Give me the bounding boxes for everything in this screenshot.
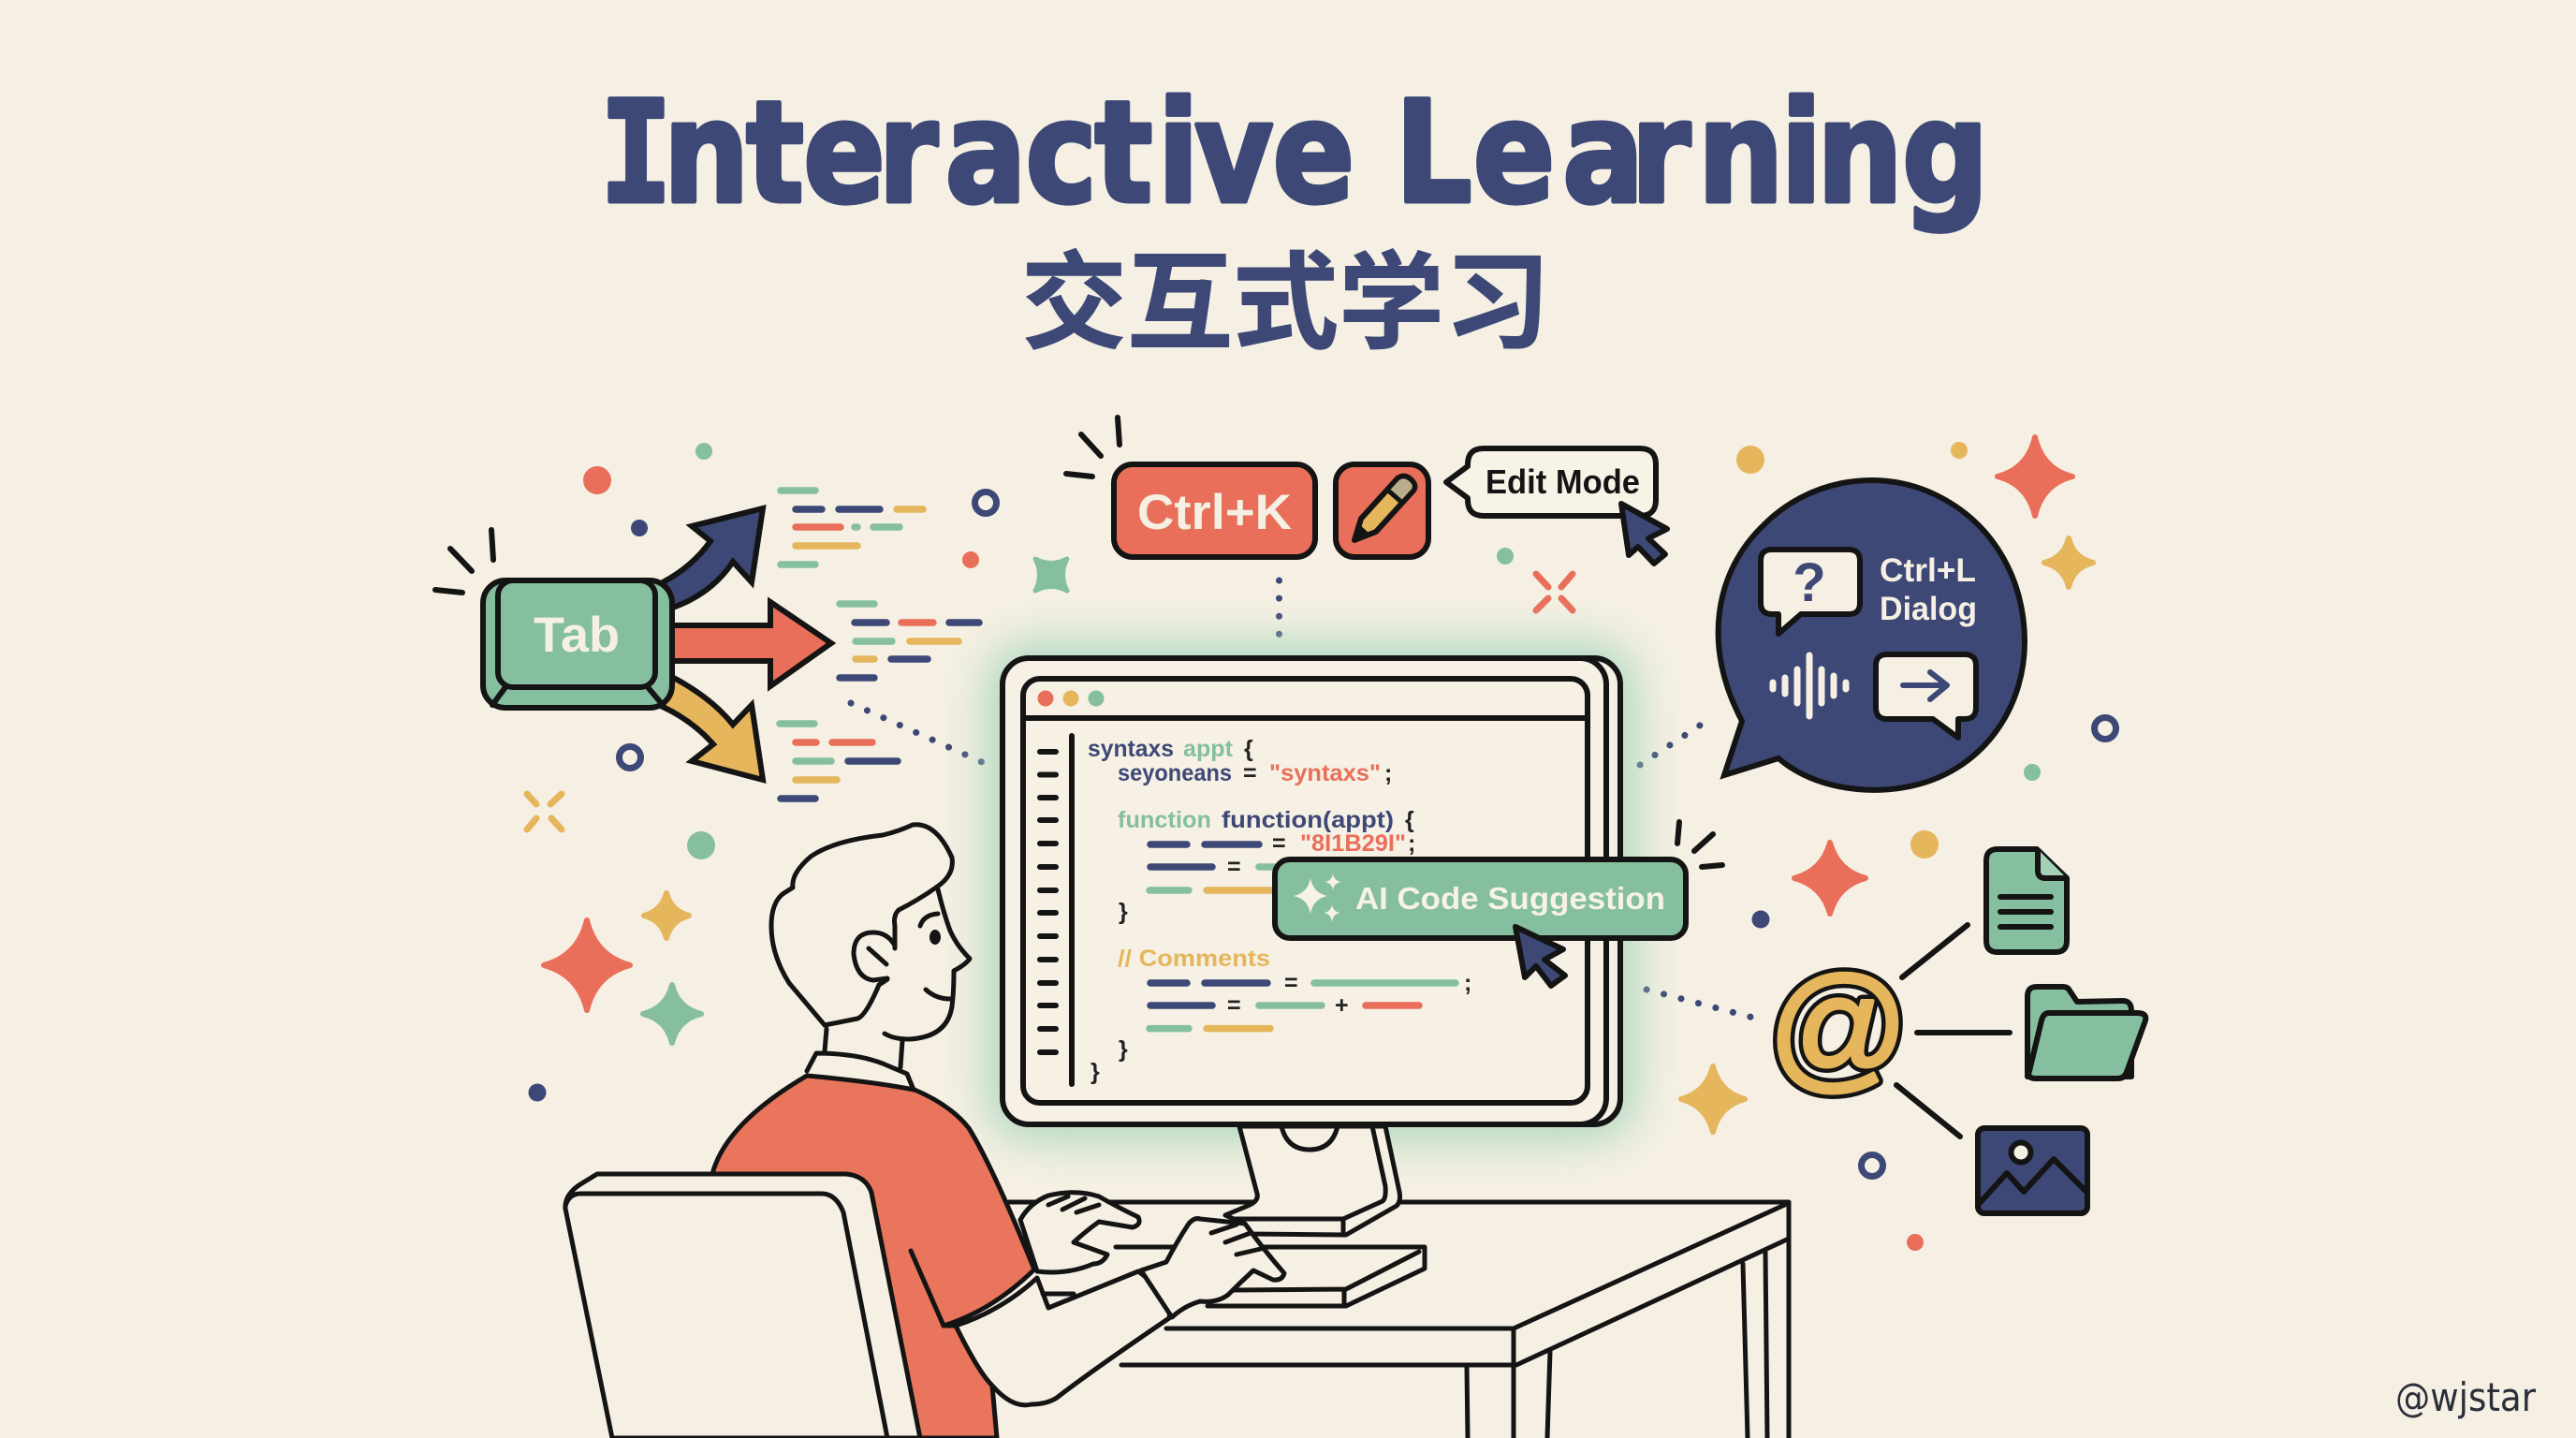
arrow: navy bbox=[663, 508, 763, 609]
shortcut: Ctrl+L dialog bubble bbox=[1719, 480, 2025, 790]
monitor front bezel bbox=[1003, 658, 1606, 1124]
label bbox=[1880, 552, 1977, 627]
title: English: nteractive Learning bbox=[664, 71, 1989, 234]
bubble: Edit Mode bbox=[1446, 448, 1656, 516]
icon: image bbox=[1978, 1128, 2087, 1213]
code lines: "8I1B29I" bbox=[1300, 830, 1406, 857]
code lines: function(appt) bbox=[1222, 807, 1394, 833]
code lines: ; bbox=[1408, 830, 1415, 857]
burst lines bbox=[1066, 418, 1120, 477]
title: English: I bbox=[600, 71, 672, 234]
code lines: ; bbox=[1464, 970, 1471, 996]
hand: front bbox=[1141, 1219, 1284, 1317]
desk bbox=[1009, 1202, 1789, 1438]
code lines: seyoneans bbox=[1118, 760, 1232, 786]
monitor glow bbox=[1003, 658, 1620, 1124]
code lines: function bbox=[1118, 807, 1211, 833]
label: AI Code Suggestion bbox=[1355, 881, 1665, 916]
icon: document bbox=[1986, 849, 2067, 952]
key: pencil bbox=[1336, 464, 1428, 557]
code lines: { bbox=[1405, 807, 1414, 833]
sleeve crease bbox=[911, 1251, 944, 1326]
key: Ctrl+K: Ctrl+K bbox=[1137, 485, 1292, 540]
code lines: ; bbox=[1384, 760, 1392, 786]
code placeholder bars bbox=[1149, 844, 1456, 1029]
icon: cursor bbox=[1515, 927, 1565, 986]
title bbox=[600, 71, 1989, 362]
watermark: @wjstar bbox=[2395, 1374, 2537, 1420]
context mentions: @ with file, folder, image bbox=[1768, 849, 2145, 1213]
code lines bbox=[1088, 736, 1471, 1085]
burst lines bbox=[1677, 822, 1722, 867]
code snippets: Tab completions bbox=[780, 491, 979, 799]
code lines: = bbox=[1243, 760, 1257, 786]
arrow: red bbox=[655, 602, 831, 686]
label: Ctrl+L bbox=[1880, 552, 1976, 589]
arm bbox=[956, 1271, 1170, 1405]
icon: at sign: @ bbox=[1768, 949, 1909, 1104]
code lines: + bbox=[1335, 992, 1349, 1019]
person at desk bbox=[565, 825, 1284, 1438]
code lines: } bbox=[1119, 1036, 1128, 1063]
icon: arrow bubble bbox=[1876, 654, 1976, 738]
chair bbox=[565, 1174, 920, 1438]
monitor stand bbox=[1225, 1126, 1400, 1235]
shortcut: Ctrl+K edit mode bbox=[1066, 418, 1667, 564]
keyboard left edge fragment bbox=[1043, 1292, 1074, 1296]
arrow: yellow bbox=[663, 676, 763, 780]
code lines: = bbox=[1227, 992, 1241, 1019]
icon: question bubble: ? bbox=[1793, 552, 1826, 613]
key label: Tab bbox=[534, 608, 620, 663]
code lines: = bbox=[1284, 970, 1298, 996]
face bbox=[885, 889, 970, 1039]
key cap bbox=[483, 580, 672, 708]
label: Dialog bbox=[1880, 591, 1977, 627]
key: Ctrl+K bbox=[1114, 464, 1315, 557]
dotted connectors bbox=[851, 580, 1753, 1018]
icon: folder bbox=[2027, 987, 2145, 1078]
decorative dots and sparkles bbox=[527, 437, 2115, 1251]
hair bbox=[771, 825, 952, 1025]
shortcut: Tab key with arrows bbox=[435, 508, 831, 780]
code lines: = bbox=[1227, 854, 1241, 880]
shirt bbox=[712, 1076, 1034, 1438]
callout: AI Code Suggestion bbox=[1275, 822, 1722, 986]
code lines: appt bbox=[1183, 736, 1234, 762]
icon: cursor bbox=[1621, 504, 1667, 564]
icon: at sign: @ bbox=[1768, 949, 1909, 1104]
code lines: "syntaxs" bbox=[1269, 760, 1381, 786]
hair back edge bbox=[825, 979, 887, 1025]
code lines: = bbox=[1272, 830, 1286, 857]
icon: question bubble bbox=[1761, 550, 1860, 634]
code lines: { bbox=[1244, 736, 1253, 762]
line gutter bbox=[1040, 736, 1072, 1084]
window buttons bbox=[1037, 691, 1105, 706]
monitor bbox=[1003, 658, 1620, 1124]
code lines: } bbox=[1090, 1059, 1100, 1085]
code lines: syntaxs bbox=[1088, 736, 1174, 762]
screen bbox=[1023, 679, 1588, 1103]
bubble: Edit Mode: Edit Mode bbox=[1486, 462, 1640, 501]
ear bbox=[854, 932, 895, 980]
title: Chinese: 交互式学习 bbox=[1021, 244, 1550, 362]
keyboard bbox=[1116, 1247, 1425, 1306]
icon: waveform bbox=[1773, 655, 1846, 716]
neck and collar bbox=[807, 1029, 914, 1090]
code lines: } bbox=[1119, 899, 1128, 925]
code lines: // Comments bbox=[1118, 946, 1270, 972]
monitor back edge bbox=[1020, 658, 1620, 1124]
icon: sparkles bbox=[1294, 873, 1341, 922]
connector lines bbox=[1896, 925, 2010, 1137]
hand: back bbox=[1020, 1193, 1139, 1272]
burst lines bbox=[435, 530, 493, 593]
